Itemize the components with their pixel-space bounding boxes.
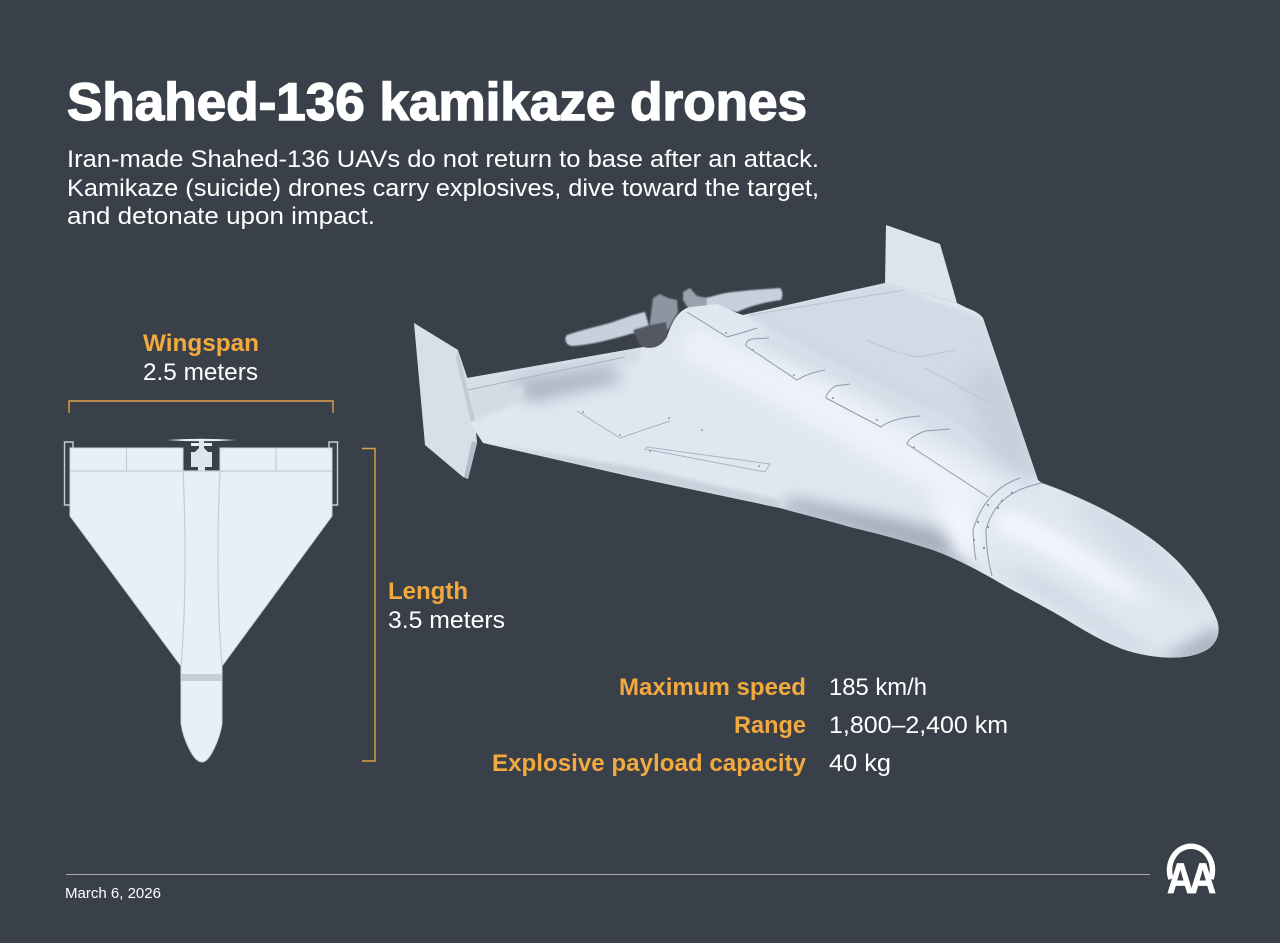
wingspan label: Wingspan	[143, 330, 259, 357]
delta wing and fuselage	[70, 448, 332, 762]
specifications	[492, 674, 1008, 777]
near wing shadow	[468, 348, 640, 392]
rear left fin	[414, 323, 477, 479]
fuselage ridge highlight	[688, 334, 984, 498]
nose shading	[1074, 496, 1209, 603]
spec: range: 1,800–2,400 km	[829, 712, 1008, 739]
lower body shading	[780, 498, 975, 575]
wingspan label	[143, 330, 259, 386]
panel lines and joint rings	[468, 290, 1042, 576]
top-view drone diagram	[64, 439, 338, 762]
spec: maximum speed	[619, 674, 927, 701]
date: March 6, 2026	[65, 886, 161, 902]
spec: range	[734, 712, 1008, 739]
motor	[633, 288, 707, 352]
tail fins	[64, 442, 338, 505]
spec: maximum speed: Maximum speed	[619, 674, 806, 701]
intro text	[67, 146, 819, 230]
far wing shading	[743, 283, 1038, 480]
length label: Length	[388, 578, 468, 605]
wingspan bracket	[69, 401, 333, 413]
title: Shahed-136 kamikaze drones	[67, 73, 807, 132]
wingspan label: 2.5 meters	[143, 359, 258, 386]
warhead band	[182, 674, 222, 681]
spec: range: Range	[734, 712, 806, 739]
rivets	[582, 332, 1013, 549]
length label: 3.5 meters	[388, 607, 505, 634]
panel lines	[70, 448, 332, 666]
spec: explosive payload: 40 kg	[829, 750, 891, 777]
intro text: Iran-made Shahed-136 UAVs do not return to base after an attack.	[67, 146, 819, 173]
icon: Anadolu Agency logo: AA	[1167, 855, 1215, 903]
fuselage and wings	[460, 280, 1230, 670]
propeller	[565, 288, 782, 346]
length bracket	[362, 448, 375, 761]
intro text: Kamikaze (suicide) drones carry explosives, dive toward the target,	[67, 175, 819, 202]
3D drone illustration	[414, 225, 1230, 670]
spec: maximum speed: 185 km/h	[829, 674, 927, 701]
rear right fin	[885, 225, 957, 303]
propeller and engine	[167, 439, 236, 471]
length label	[388, 578, 505, 634]
intro text: and detonate upon impact.	[67, 203, 375, 230]
spec: explosive payload: Explosive payload capacity	[492, 750, 807, 777]
